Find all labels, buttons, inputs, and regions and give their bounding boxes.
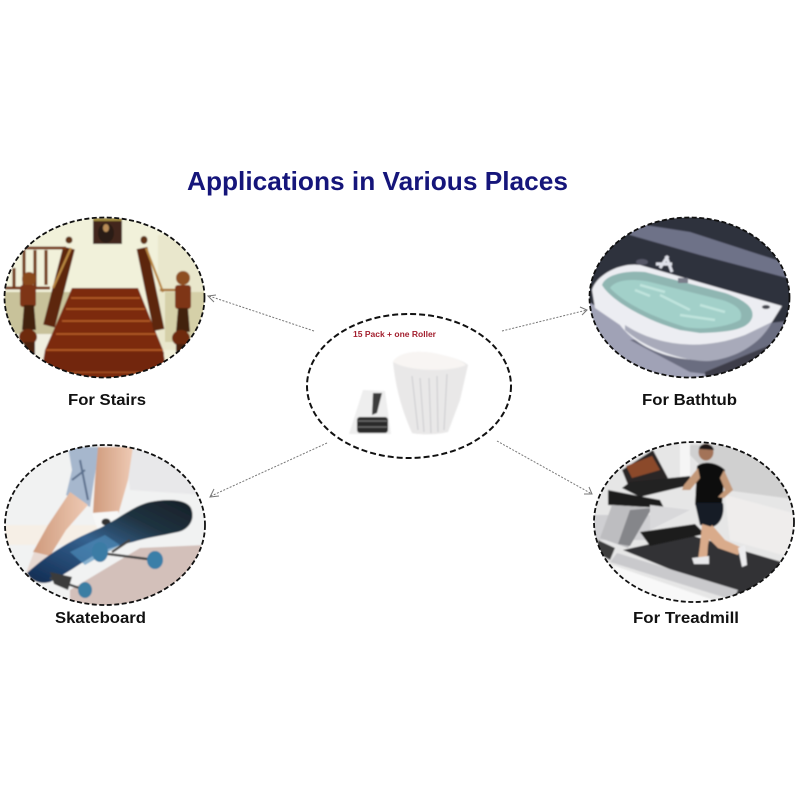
panel: treadmill photo: [590, 440, 800, 605]
icon: wall painting: [93, 218, 122, 244]
label: skateboard: Skateboard: [55, 610, 146, 627]
left newel post: [19, 272, 37, 358]
title: Applications in Various Places: [187, 166, 568, 196]
panel: stairs photo: [0, 215, 210, 380]
icon: tape roll: [393, 352, 468, 434]
treadmill arm: [600, 490, 690, 548]
arrow: to stairs: [208, 295, 314, 331]
legs: [33, 492, 88, 556]
label: for stairs: For Stairs: [68, 392, 146, 409]
icon: roller in bag: [349, 390, 391, 434]
sock and foot: [94, 510, 119, 529]
staircase: [40, 288, 168, 380]
side rail: [610, 553, 738, 600]
right railing: [140, 236, 178, 330]
panel: skateboard photo: [0, 440, 210, 610]
arrow: to skateboard: [210, 443, 327, 497]
panel: product centre: [307, 314, 511, 458]
wheels and trucks: [50, 540, 163, 598]
label: for bathtub: For Bathtub: [642, 392, 737, 409]
right newel post: [172, 271, 191, 356]
shorts: [66, 447, 100, 507]
console screen: [622, 450, 690, 497]
panel: bathtub photo: [585, 215, 795, 380]
tub: [592, 265, 782, 361]
runner: [682, 444, 747, 567]
label: for treadmill: For Treadmill: [633, 610, 739, 627]
deck: [27, 500, 193, 583]
left railing: [5, 236, 72, 326]
faucet: [656, 256, 672, 272]
product label: 15 Pack + one Roller: [353, 330, 436, 339]
arrow: to bathtub: [502, 307, 587, 331]
arrow: to treadmill: [497, 441, 592, 494]
belt: [623, 535, 785, 598]
